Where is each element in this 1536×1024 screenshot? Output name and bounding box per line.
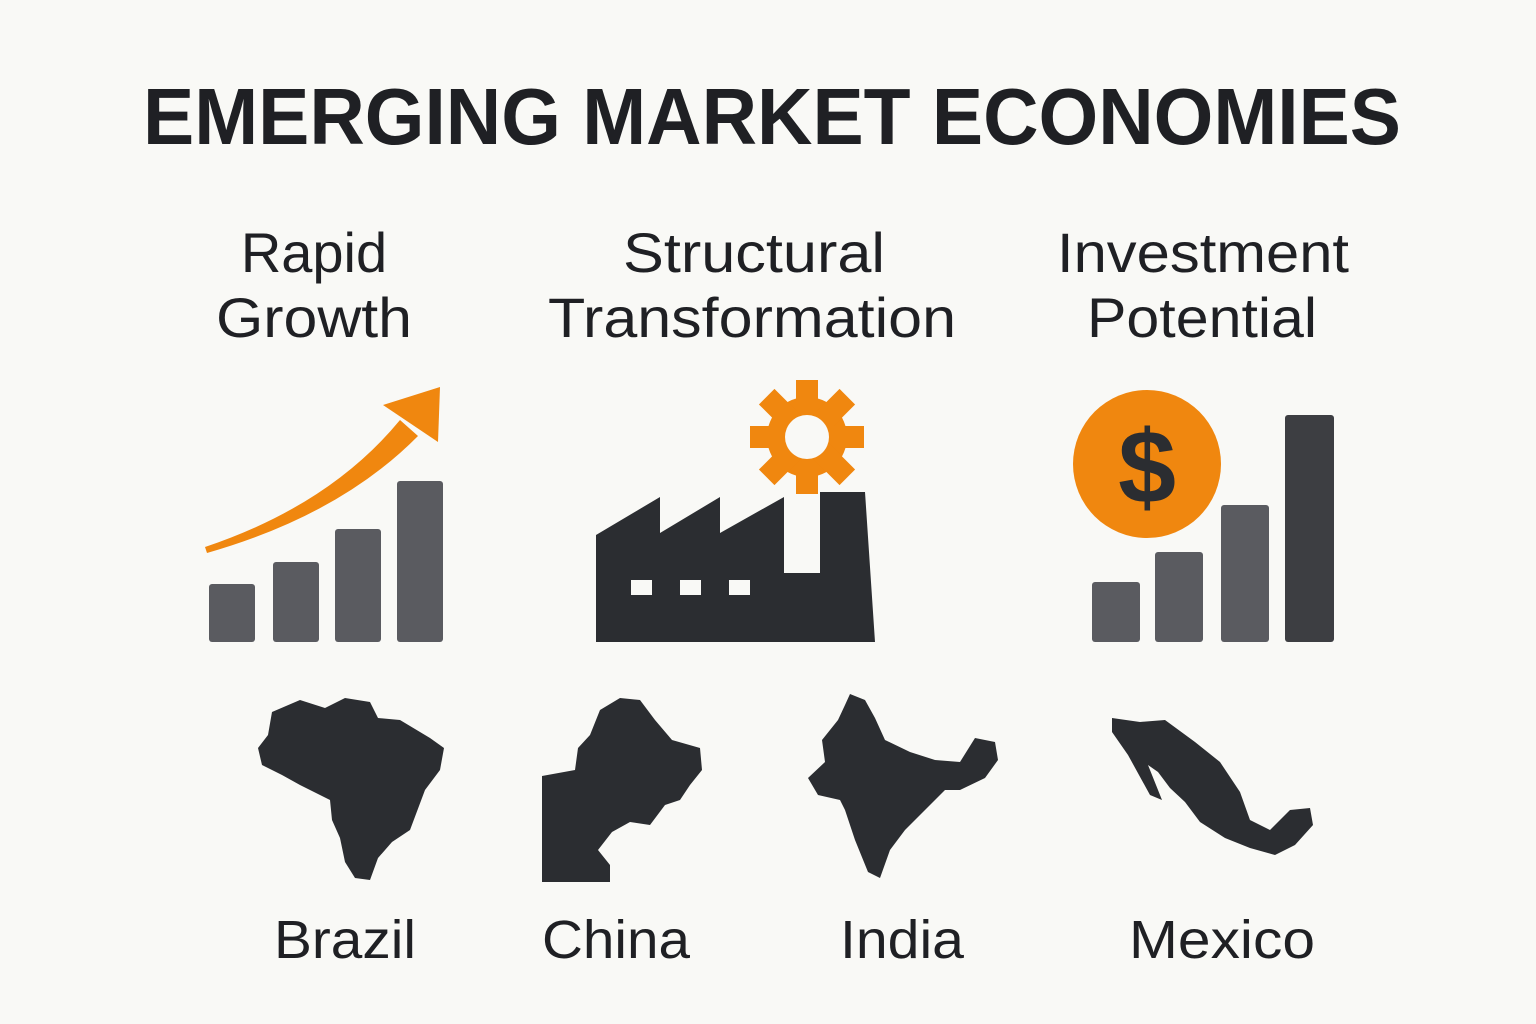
icon: growth arrow (205, 387, 440, 553)
label: Mexico: Mexico (1129, 910, 1315, 970)
heading: Structural Transformation: Structural (623, 221, 885, 284)
heading: Investment Potential: Investment (1057, 221, 1349, 284)
heading: Investment Potential (1057, 221, 1349, 349)
heading: Structural Transformation: Transformation (548, 286, 956, 349)
heading: Rapid Growth: Rapid (241, 221, 387, 284)
icon: dollar coin (1073, 390, 1221, 538)
heading: Structural Transformation (548, 221, 956, 349)
heading: Rapid Growth (216, 221, 412, 349)
map: China (542, 698, 702, 882)
chart: investment bars with coin (1073, 390, 1334, 642)
heading: Investment Potential: Potential (1087, 286, 1317, 349)
label: India: India (840, 910, 965, 970)
map: Brazil (258, 698, 444, 880)
label: Brazil: Brazil (274, 910, 416, 970)
icon: gear (750, 380, 864, 494)
chart: rapid growth bars with arrow (205, 387, 443, 642)
icon: factory with gear (596, 380, 875, 642)
label: China: China (542, 910, 691, 970)
title: EMERGING MARKET ECONOMIES (143, 72, 1401, 161)
heading: Rapid Growth: Growth (216, 286, 412, 349)
icon: dollar coin: $ (1118, 410, 1176, 526)
map: India (808, 694, 998, 878)
map: Mexico (1112, 718, 1313, 855)
